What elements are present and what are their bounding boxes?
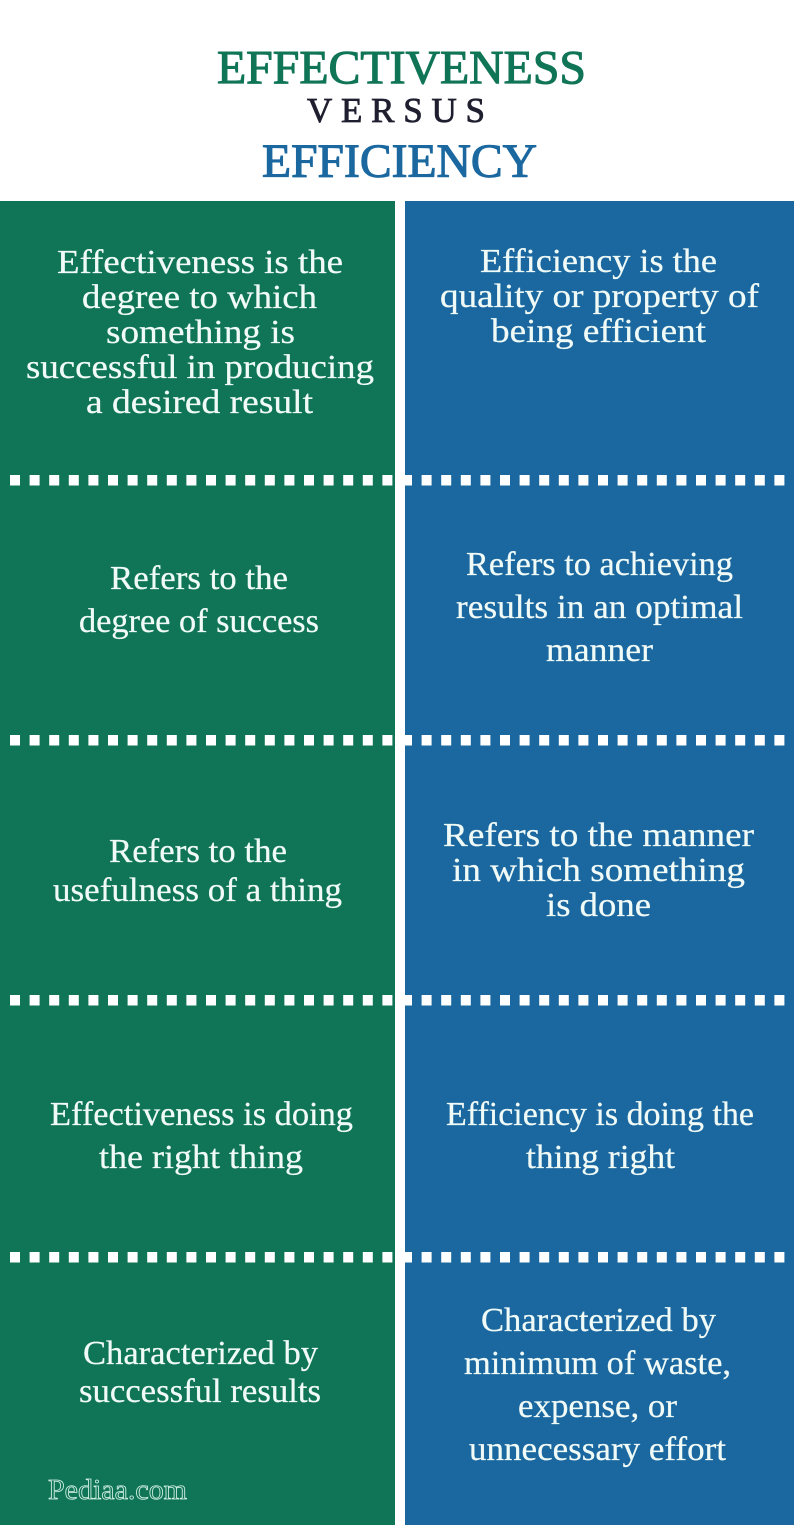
row 3: efficiency manner: Refers to the manner	[443, 817, 755, 854]
title: versus: VERSUS	[307, 91, 485, 130]
row 4: effectiveness doing: Effectiveness is doing	[50, 1096, 353, 1133]
row 1: effectiveness definition: successful in producing	[26, 349, 374, 386]
row 3: effectiveness usefulness: usefulness of a thing	[53, 872, 342, 909]
row 4: efficiency doing	[446, 1096, 754, 1176]
row 1: efficiency definition: being efficient	[491, 313, 707, 350]
row 3: efficiency manner	[443, 817, 755, 924]
row 1: efficiency definition: Efficiency is the	[480, 243, 717, 280]
panel: effectiveness column	[0, 201, 395, 1525]
row 3: effectiveness usefulness	[53, 833, 342, 909]
row 2: effectiveness meaning	[79, 560, 319, 640]
panel: efficiency column	[405, 201, 794, 1525]
row 5: efficiency characteristic: minimum of waste,	[464, 1345, 731, 1382]
title: effectiveness: EFFECTIVENESS	[217, 42, 586, 94]
row 5: efficiency characteristic: Characterized by	[481, 1302, 716, 1339]
row 2: effectiveness meaning: degree of success	[79, 603, 319, 640]
row 4: efficiency doing: thing right	[526, 1139, 676, 1176]
row 5: effectiveness characteristic: successful results	[79, 1373, 321, 1410]
row 5: efficiency characteristic	[464, 1302, 731, 1468]
row 5: effectiveness characteristic	[79, 1335, 321, 1410]
row 1: effectiveness definition: a desired result	[86, 384, 314, 421]
row 1: effectiveness definition	[26, 244, 374, 421]
row 3: efficiency manner: is done	[546, 887, 651, 924]
row 1: effectiveness definition: Effectiveness is the	[57, 244, 343, 281]
row 5: efficiency characteristic: unnecessary effort	[469, 1431, 727, 1468]
row 1: effectiveness definition: degree to which	[82, 279, 317, 316]
title block	[217, 42, 586, 188]
row 2: effectiveness meaning: Refers to the	[110, 560, 288, 597]
row 4: efficiency doing: Efficiency is doing the	[446, 1096, 754, 1133]
row 4: effectiveness doing	[50, 1096, 353, 1176]
row 3: efficiency manner: in which something	[452, 852, 745, 889]
row 1: efficiency definition: quality or property of	[440, 278, 760, 315]
row 5: effectiveness characteristic: Characterized by	[83, 1335, 318, 1372]
logo: Pediaa.com: Pediaa.com	[48, 1474, 187, 1506]
row 2: efficiency meaning	[456, 546, 743, 669]
title: efficiency: EFFICIENCY	[262, 135, 537, 188]
row 4: effectiveness doing: the right thing	[99, 1139, 303, 1176]
row 2: efficiency meaning: manner	[546, 632, 654, 669]
row 3: effectiveness usefulness: Refers to the	[109, 833, 287, 870]
row 2: efficiency meaning: Refers to achieving	[466, 546, 733, 583]
row 5: efficiency characteristic: expense, or	[518, 1388, 678, 1425]
row 2: efficiency meaning: results in an optimal	[456, 589, 743, 626]
row 1: effectiveness definition: something is	[106, 314, 295, 351]
row 1: efficiency definition	[440, 243, 760, 350]
